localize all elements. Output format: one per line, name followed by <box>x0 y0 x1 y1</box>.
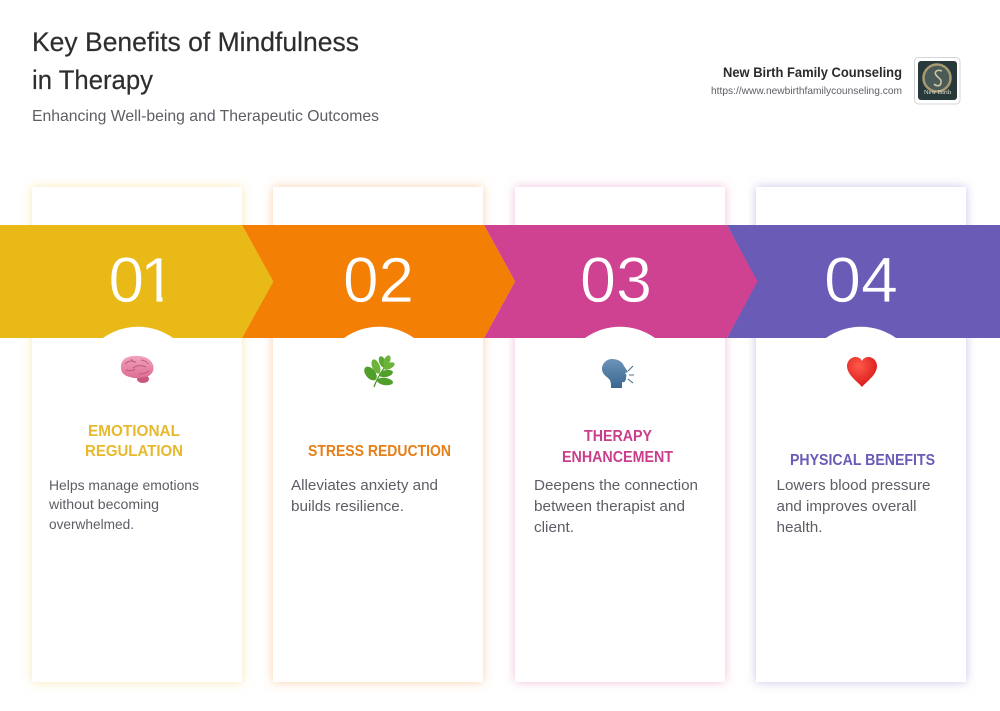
text: card 1: overwhelmed. <box>49 517 134 533</box>
subtitle: Enhancing Well-being and Therapeutic Outcomes <box>32 108 379 125</box>
text: card 4: and improves overall <box>776 498 916 515</box>
text: card 3: between therapist and <box>534 498 685 515</box>
brand name: New Birth Family Counseling <box>723 64 902 80</box>
heading: card 4: PHYSICAL BENEFITS <box>790 452 935 469</box>
heading: card 3 <box>562 428 673 466</box>
text: card 1 <box>48 478 199 533</box>
text: card 2: Alleviates anxiety and <box>291 477 438 494</box>
panel: card 2 background <box>273 187 483 682</box>
notch 2 <box>344 327 414 338</box>
title: in Therapy <box>32 65 153 95</box>
arrow band 3 <box>484 225 758 338</box>
text: card 4: health. <box>776 519 822 536</box>
text: card 4: Lowers blood pressure <box>776 477 930 494</box>
number 03: 03 <box>580 244 652 316</box>
brand block <box>711 58 960 104</box>
icon: brain <box>121 356 154 383</box>
text: card 4 <box>776 477 930 536</box>
notch 4 <box>826 327 896 338</box>
icon: heart <box>847 357 877 387</box>
text: card 3 <box>534 477 698 536</box>
number 04: 04 <box>824 244 898 316</box>
heading: card 3: ENHANCEMENT <box>562 449 673 466</box>
arrow band 4 <box>727 225 1000 338</box>
heading: card 1 <box>85 423 183 460</box>
heading: card 2: STRESS REDUCTION <box>308 443 451 460</box>
panel: card 1 background <box>32 187 242 682</box>
brand url: https://www.newbirthfamilycounseling.com <box>711 85 902 97</box>
text: card 1: without becoming <box>48 497 159 513</box>
text: card 3: Deepens the connection <box>534 477 698 494</box>
logo <box>914 58 960 104</box>
text: card 3: client. <box>534 519 574 536</box>
heading: card 1: REGULATION <box>85 443 183 460</box>
arrow band 1 <box>0 225 274 338</box>
icon: herb <box>362 354 396 387</box>
text: card 1: Helps manage emotions <box>49 478 199 494</box>
number 02: 02 <box>343 244 414 316</box>
notch 3 <box>585 327 655 338</box>
icon: speaking head <box>602 359 634 388</box>
number 01: 1 <box>140 244 176 316</box>
panel: card 4 background <box>756 187 966 682</box>
text: card 2 <box>291 477 438 515</box>
number 01: 0 <box>108 244 144 316</box>
number 01 <box>108 244 176 316</box>
title <box>32 27 359 95</box>
heading: card 1: EMOTIONAL <box>88 423 180 440</box>
heading: card 3: THERAPY <box>584 428 653 445</box>
title: Key Benefits of Mindfulness <box>32 27 359 57</box>
logo: New Birth <box>924 89 952 96</box>
panel: card 3 background <box>515 187 725 682</box>
arrow band 2 <box>242 225 515 338</box>
text: card 2: builds resilience. <box>291 498 404 515</box>
notch 1 <box>103 327 173 338</box>
